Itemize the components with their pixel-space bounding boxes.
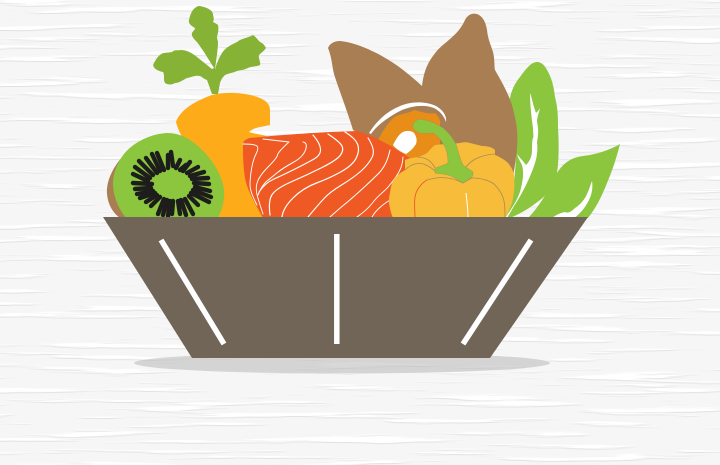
basket slat left [161,240,224,344]
salmon [243,131,410,218]
basket shadow [134,352,550,374]
back leaf vein [505,93,540,218]
sweet potato left [328,41,422,140]
almond [369,102,446,165]
front leaf [528,144,620,218]
pepper red ridge [415,180,427,218]
pepper segment lines [405,154,505,217]
carrot leaves [153,6,266,94]
kiwi skin [106,158,126,217]
pepper [389,119,514,218]
almond flesh [378,110,440,158]
back leaf [505,62,559,218]
almond shell [369,102,446,134]
basket [103,217,588,358]
basket slat right [463,240,531,344]
front leaf vein [552,181,592,218]
almond highlight [393,131,417,154]
pepper stem [413,119,473,183]
carrot [176,93,270,217]
kiwi flesh [113,133,224,218]
sweet potato right [422,14,518,174]
pepper white highlight [466,193,468,217]
food items [107,6,620,218]
kiwi seeds [133,152,211,216]
salmon white lines [243,132,403,217]
kiwi [107,133,224,218]
basket slat centre [334,234,340,344]
